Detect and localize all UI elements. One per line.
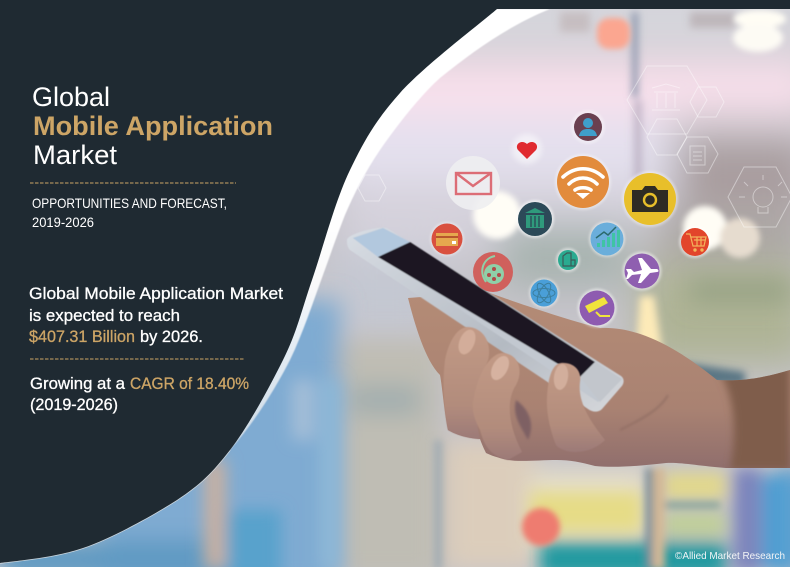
hand holding the phone: palm and wrist (400, 285, 790, 475)
market size statement: Global Mobile Application Market (29, 285, 283, 303)
fingernails (455, 327, 479, 357)
icon: atom (529, 278, 559, 308)
subtitle: 2019-2026 (32, 214, 94, 230)
white curved band behind dark panel (0, 9, 550, 450)
app icon cloud (430, 110, 711, 328)
icon: wifi (555, 154, 611, 210)
title: Global (32, 82, 110, 112)
CAGR statement: (2019-2026) (30, 396, 118, 414)
market size statement: $407.31 Billion (29, 328, 135, 346)
copyright credit: ©Allied Market Research (675, 550, 785, 562)
phone front glass (353, 228, 622, 402)
phone body (347, 228, 624, 412)
dashed divider: title (30, 182, 236, 184)
icon: heart (512, 134, 542, 164)
subtitle: OPPORTUNITIES AND FORECAST, (32, 195, 227, 211)
smartphone (347, 228, 624, 412)
icon: bank (516, 200, 554, 238)
icon: mail (446, 156, 500, 210)
CAGR statement (30, 375, 249, 414)
icon: shopping cart (679, 226, 711, 258)
icon: person (571, 110, 605, 144)
icon: growth chart (589, 221, 625, 257)
dashed divider: statistics (30, 358, 244, 360)
icon: small teal document (556, 248, 580, 272)
title (32, 82, 273, 170)
icon: security camera (578, 288, 616, 328)
CAGR statement: Growing at a (30, 375, 126, 393)
title: Mobile Application (33, 111, 273, 141)
market size statement: by 2026. (140, 328, 203, 346)
market size statement (29, 285, 283, 346)
icon: airplane (622, 252, 662, 290)
CAGR statement: CAGR of 18.40% (130, 375, 249, 393)
market size statement: is expected to reach (29, 307, 180, 325)
title: Market (33, 140, 117, 170)
subtitle (32, 195, 227, 230)
phone screen (378, 242, 595, 377)
thin light edge along lower curve (0, 450, 230, 563)
decorative hexagon icons: building, document, bulb (358, 66, 790, 227)
icon: camera (622, 171, 678, 227)
icon: film reel (473, 252, 513, 292)
fingers over the phone (444, 327, 605, 460)
icon: card (430, 222, 464, 256)
